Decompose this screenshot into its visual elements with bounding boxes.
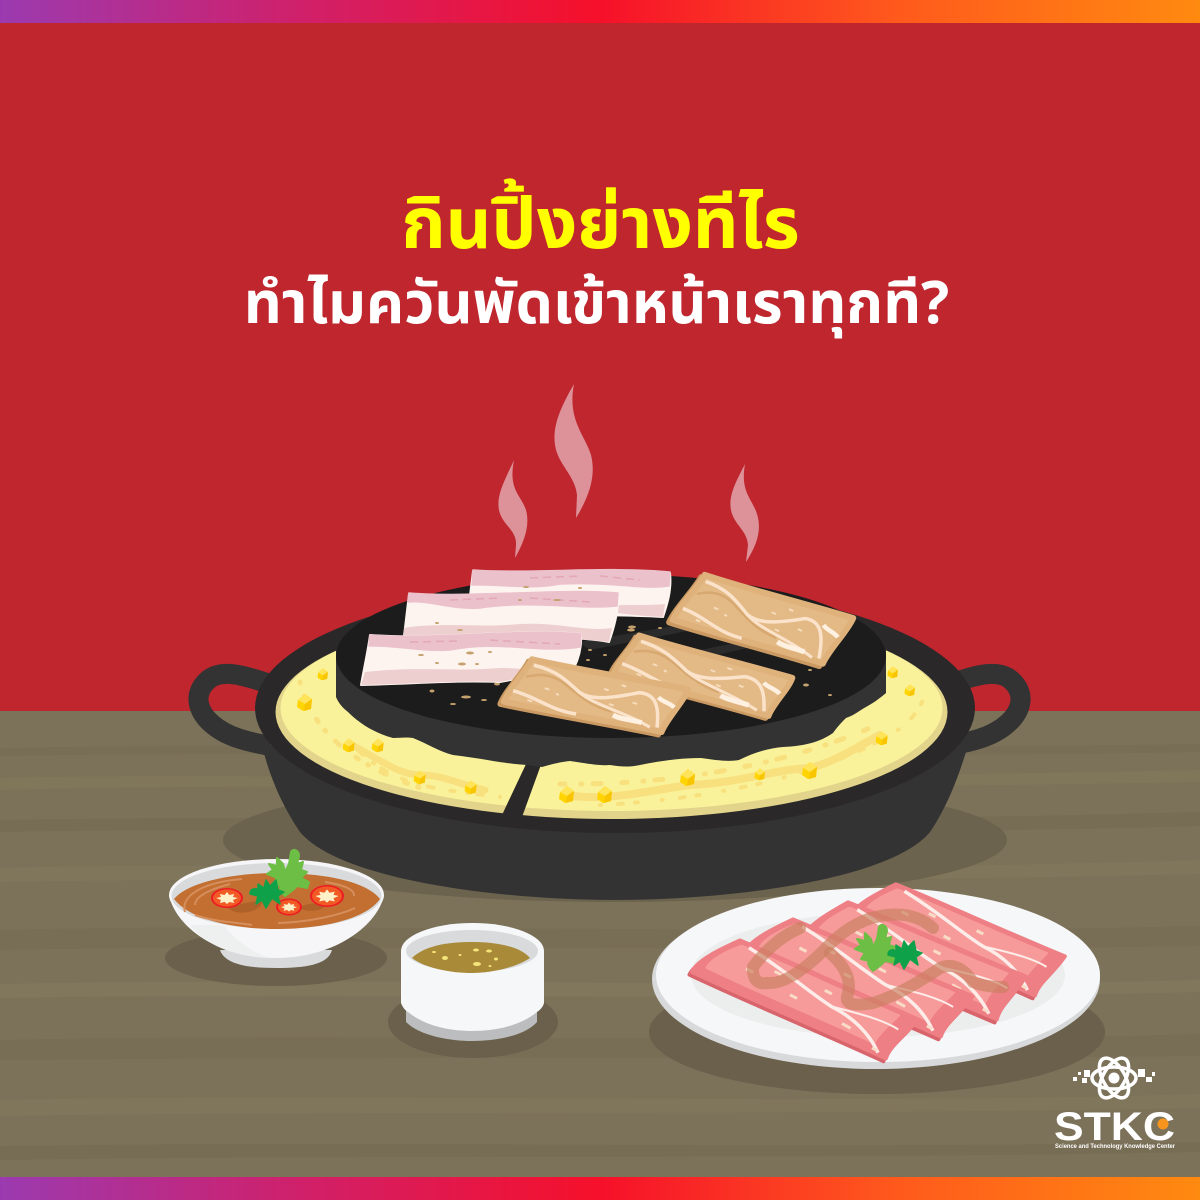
- bowl inner: [172, 863, 382, 929]
- steam: centre wisp: [554, 384, 593, 518]
- plate shadow: [649, 970, 1105, 1094]
- belly strip: back: [468, 570, 670, 617]
- bottom gradient bar: [0, 1177, 1200, 1200]
- griddle top surface: [336, 574, 886, 738]
- steam: left wisp: [498, 460, 527, 558]
- pan shadow: [223, 778, 1007, 902]
- title line 1: กินปิ้งย่างทีไร: [401, 173, 800, 280]
- top gradient bar: [0, 0, 1200, 23]
- sauce: [174, 873, 380, 929]
- title: [244, 173, 949, 350]
- egg ring: [280, 605, 942, 811]
- belly strip: middle: [404, 592, 618, 642]
- sauce shadows: [228, 902, 325, 913]
- sauce flecks: [432, 948, 498, 967]
- pork slice 3: [800, 896, 1028, 1023]
- bowl foot: [220, 950, 332, 968]
- cup body: [401, 950, 544, 1031]
- background: red wall: [0, 0, 1200, 712]
- bowl shadow: [165, 930, 387, 986]
- steam: right wisp: [730, 464, 759, 562]
- brown meat: front: [499, 659, 690, 735]
- meat plate: [649, 878, 1105, 1094]
- logo: STKC: [1054, 1053, 1176, 1150]
- brown meat slices: [499, 574, 855, 735]
- chilli slices: [211, 885, 344, 916]
- coriander garnish: [250, 850, 309, 908]
- sauce drizzle on meat: [753, 915, 1003, 1005]
- logo wordmark: STKC: [1054, 1105, 1175, 1149]
- griddle highlight: [578, 610, 775, 650]
- griddle side: [336, 650, 886, 767]
- brown meat: middle: [609, 635, 794, 719]
- crumbs on griddle: [430, 626, 832, 706]
- cup sauce: [412, 942, 530, 973]
- left handle: [198, 674, 270, 746]
- bowl rim: [169, 859, 384, 931]
- pork slice 4: [847, 878, 1067, 998]
- spicy sauce bowl: [165, 850, 387, 986]
- cup rim: [401, 923, 544, 979]
- steam: [498, 384, 759, 562]
- bowl body: [169, 895, 384, 958]
- plate edge: [652, 889, 1100, 1069]
- egg browning: [300, 680, 926, 805]
- cup inner: [406, 930, 538, 972]
- logo dot: [1158, 1118, 1168, 1130]
- logo dots: [1073, 1069, 1155, 1083]
- brown meat: right: [668, 574, 855, 667]
- belly strip: front: [361, 632, 581, 685]
- small dipping cup: [388, 923, 558, 1058]
- title line 2: ทำไมควันพัดเข้าหน้าเราทุกที?: [244, 260, 949, 350]
- pork belly strips: [361, 570, 670, 685]
- plate top: [656, 888, 1100, 1062]
- cup foot: [406, 1005, 537, 1041]
- pork slice 1: [688, 933, 920, 1061]
- right handle: [949, 674, 1021, 746]
- raw pork slices: [688, 878, 1067, 1061]
- egg ring edge: [276, 605, 948, 819]
- coriander garnish: [855, 925, 922, 971]
- divider slot in egg ring: [502, 762, 542, 817]
- sauce swirls: [184, 879, 355, 925]
- background: wooden table: [0, 711, 1200, 1178]
- seasoning flecks: [418, 586, 582, 666]
- logo atom icon: [1092, 1053, 1136, 1103]
- logo caption: Science and Technology Knowledge Center: [1055, 1144, 1176, 1150]
- pork slice 2: [741, 912, 975, 1039]
- pan rim: [255, 583, 975, 833]
- plate well: [691, 913, 1065, 1037]
- pan body: [262, 745, 968, 900]
- corn pieces: [297, 666, 915, 803]
- cup shadow: [388, 986, 558, 1058]
- grill pan: [198, 574, 1021, 900]
